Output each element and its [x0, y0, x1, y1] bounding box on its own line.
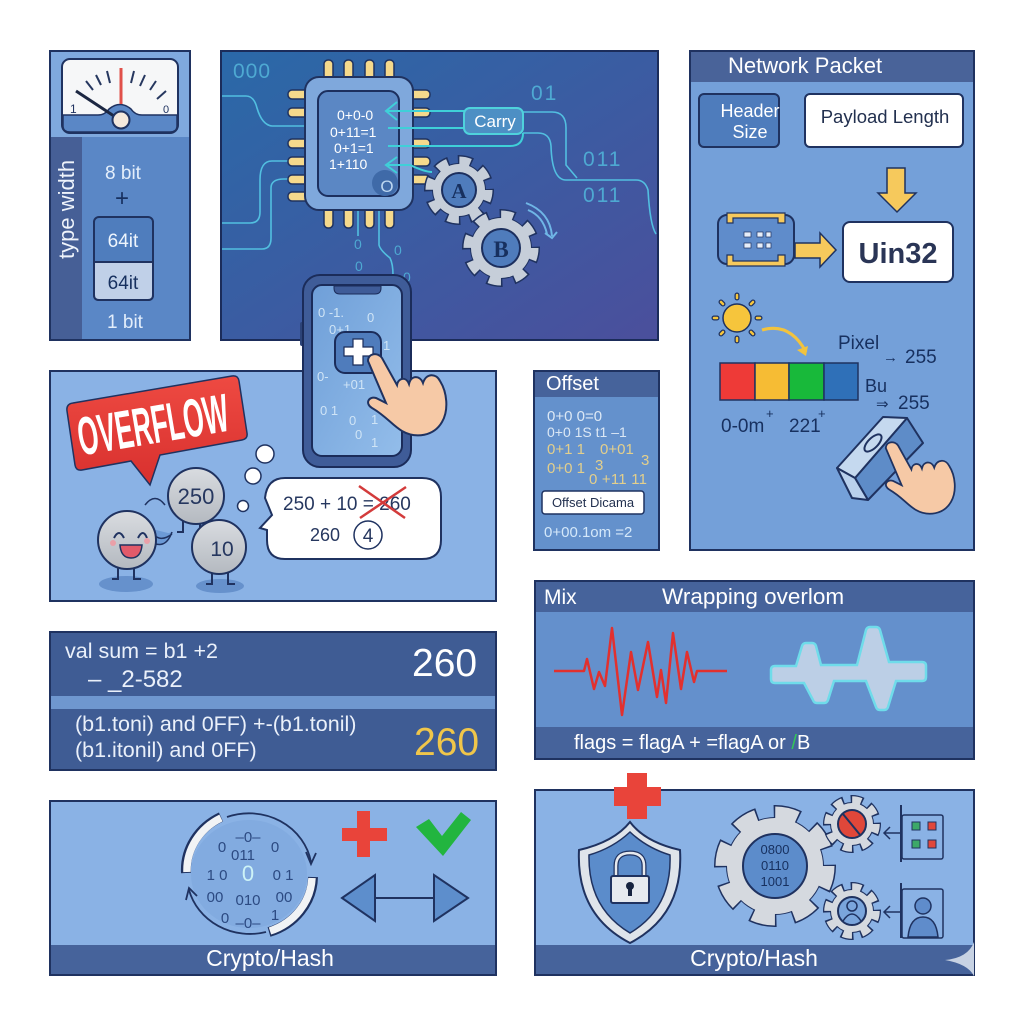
- panel: code sum: [50, 632, 496, 770]
- payload length box: Payload Length: [821, 106, 949, 127]
- offset equations: 0+0 0=0: [547, 408, 602, 425]
- character: coin 250: 250: [178, 484, 214, 509]
- uint32 box: [843, 222, 953, 282]
- color bar: [720, 363, 858, 400]
- pixel labels: [838, 333, 937, 414]
- pixel labels: 255: [898, 393, 930, 414]
- offset equations: 0+0 1S t1 –1: [547, 424, 627, 440]
- icon: analog gauge: 0: [163, 104, 169, 116]
- binary digits: 000: [233, 60, 271, 83]
- icon: cpu chip: 0+0-0: [337, 107, 373, 123]
- icon: cycle of bits: 00: [276, 889, 292, 906]
- payload length box: [805, 94, 963, 147]
- code line: – _2-582: [88, 666, 183, 693]
- header size box: Size: [732, 122, 768, 142]
- header bar: [691, 52, 973, 82]
- binary digits: 0: [355, 258, 363, 274]
- arrow: right: [795, 233, 836, 267]
- icon: cycle of bits: 0: [218, 839, 226, 856]
- rotation arrow: [526, 203, 557, 238]
- icon: cpu chip: 0+1=1: [334, 140, 374, 156]
- header: Wrapping overlom: [662, 584, 844, 609]
- footer: [536, 945, 973, 974]
- stacked 64 bit blocks: 64it: [108, 231, 139, 252]
- icon: cpu chip: O: [380, 177, 394, 196]
- header: [536, 582, 973, 612]
- icon: cpu chip: 0+11=1: [330, 124, 377, 140]
- speech bubble: 260: [310, 525, 340, 545]
- icon: sun: [714, 295, 760, 341]
- pixel labels: Pixel: [838, 333, 879, 354]
- label: 1 bit: 1 bit: [107, 312, 144, 333]
- offset label box: [542, 491, 644, 514]
- binary digits: 0: [354, 236, 362, 252]
- icon: cycle of bits: 1: [271, 907, 279, 924]
- phone digits: 0 -1.: [318, 305, 344, 320]
- character: coin 10: 10: [210, 538, 234, 561]
- value 260 yellow: 260: [414, 721, 479, 764]
- icon: analog gauge: [62, 59, 178, 133]
- icon: pointing hand: [368, 354, 446, 435]
- icon: cycle of bits: 00: [207, 889, 223, 906]
- icon: main gear with bits: [723, 814, 827, 918]
- icon: cycle of bits: [186, 813, 316, 934]
- phone digits: +01: [343, 377, 365, 392]
- offset result: 0+00.1om =2: [544, 524, 632, 541]
- offset equations: 0+01: [600, 441, 634, 458]
- offset label box: Offset Dicama: [552, 495, 635, 510]
- offset equations: 3: [641, 452, 649, 469]
- phone digits: 0 1: [320, 403, 338, 418]
- binary digits: 011: [583, 148, 622, 171]
- icon: cycle of bits: –0–: [235, 915, 261, 932]
- icon: small gear with blocked symbol: [828, 800, 876, 848]
- type width side strip: [51, 137, 82, 339]
- icon: gear B: B: [493, 237, 509, 262]
- icon: analog gauge: 1: [70, 102, 77, 116]
- offset equations: 0 +11 11: [589, 471, 647, 488]
- range labels: [721, 406, 826, 437]
- phone digits: [317, 305, 390, 450]
- header size box: Header: [720, 101, 780, 121]
- circuit traces: [222, 96, 656, 275]
- icon: cycle of bits: 0: [242, 861, 254, 886]
- code line: (b1.toni) and 0FF) +-(b1.tonil): [75, 712, 356, 736]
- icon: cycle of bits: 1 0: [207, 867, 227, 884]
- offset equations: 0+0 1: [547, 460, 585, 477]
- binary digits: 01: [531, 82, 558, 105]
- phone digits: 1: [371, 435, 378, 450]
- icon: status grid card: [901, 805, 943, 862]
- binary digits: [233, 60, 622, 285]
- icon: user card: [901, 883, 943, 938]
- phone with touch: [300, 275, 446, 467]
- icon: gear A: [430, 161, 488, 219]
- panel: crypto hash left: [50, 801, 496, 975]
- icon: red plus: [614, 773, 661, 819]
- header: Mix: [544, 586, 577, 609]
- footer: Crypto/Hash: [690, 945, 818, 971]
- pixel labels: Bu: [865, 376, 887, 396]
- icon: cycle of bits: 011: [231, 847, 255, 864]
- character: smiling coin: [98, 511, 172, 592]
- stacked 64 bit blocks: [94, 217, 153, 300]
- range labels: 0-0m: [721, 416, 764, 437]
- chart: red waveform: [554, 628, 727, 715]
- icon: cpu chip: 1+110: [329, 156, 367, 172]
- overflow sign: [67, 376, 247, 485]
- panel: overflow: [50, 371, 496, 601]
- icon: gear A: A: [451, 179, 467, 203]
- panel: processor and carry: [221, 51, 658, 340]
- binary digits: 0: [403, 269, 411, 285]
- binary digits: 0: [394, 242, 402, 258]
- offset equations: [547, 408, 649, 488]
- icon: small gear with user: [828, 887, 876, 935]
- offset header: Offset: [546, 373, 599, 395]
- plus button: [335, 332, 381, 373]
- icon: cycle of bits: 010: [235, 892, 261, 909]
- icon: green check: [416, 812, 471, 856]
- phone digits: 0-: [317, 369, 329, 384]
- chart: wrapped waveform: [771, 627, 926, 710]
- offset header: [535, 372, 658, 397]
- icon: cycle of bits: 0 1: [273, 867, 293, 884]
- phone digits: 0: [349, 413, 356, 428]
- icon: red plus: [342, 811, 387, 857]
- panel: crypto hash right: [535, 773, 974, 976]
- icon: packet chip: [718, 213, 794, 266]
- plus sign: +: [115, 185, 129, 212]
- character: coin 250: [145, 468, 224, 532]
- character: coin 10: [192, 520, 246, 593]
- icon: main gear with bits: 0800: [761, 842, 789, 857]
- corner sparkle: [945, 942, 974, 976]
- range labels: +: [766, 406, 774, 421]
- icon: cycle of bits: 0: [271, 839, 279, 856]
- curved arrow: [762, 328, 806, 352]
- value 260 white: 260: [412, 642, 477, 685]
- pixel labels: ⇒: [876, 396, 889, 413]
- panel: wrapping waveform: [535, 581, 974, 759]
- type width side strip: type width: [54, 160, 79, 259]
- icon: cycle of bits: 0: [221, 910, 229, 927]
- speech bubble: [260, 478, 441, 559]
- label: carry: Carry: [474, 112, 516, 131]
- header bar: Network Packet: [728, 53, 882, 78]
- icon: shield with lock: [579, 822, 680, 943]
- phone digits: 0+1: [329, 322, 351, 337]
- icon: pointing hand: [886, 442, 955, 514]
- icon: gear B: [468, 204, 534, 281]
- range labels: 221: [789, 416, 821, 437]
- offset equations: 0+1 1: [547, 441, 585, 458]
- label: 8 bit: 8 bit: [105, 163, 142, 184]
- stacked 64 bit blocks: 64it: [108, 273, 139, 294]
- range labels: +: [818, 406, 826, 421]
- panel: offset: [534, 371, 659, 550]
- header size box: [699, 94, 780, 147]
- icon: main gear with bits: 1001: [761, 874, 789, 889]
- label: carry: [464, 108, 523, 134]
- phone digits: 1: [371, 412, 378, 427]
- overflow sign: OVERFLOW: [73, 383, 233, 467]
- arrow head: [797, 346, 808, 356]
- thought bubbles: [238, 445, 274, 512]
- phone digits: 0: [355, 427, 362, 442]
- icon: cpu chip: [288, 60, 523, 228]
- icon: double arrow: [342, 875, 468, 921]
- arrows into gears: [884, 827, 901, 918]
- binary digits: 011: [583, 184, 622, 207]
- icon: main gear with bits: 0110: [761, 858, 789, 873]
- footer: [51, 945, 495, 974]
- footer: Crypto/Hash: [206, 945, 334, 971]
- speech bubble: 4: [363, 526, 374, 547]
- panel: type width gauge: [50, 51, 190, 340]
- arrow: down: [878, 168, 916, 212]
- icon: device block: [837, 417, 923, 500]
- phone digits: 0: [367, 310, 374, 325]
- offset equations: 3: [595, 457, 603, 474]
- pixel labels: 255: [905, 347, 937, 368]
- footer code: [536, 727, 973, 758]
- footer code: flags = flagA + =flagA or /B: [574, 732, 810, 754]
- code line: (b1.itonil) and 0FF): [75, 738, 257, 762]
- pixel labels: →: [883, 349, 898, 366]
- phone digits: 1: [383, 338, 390, 353]
- panel: network packet: [690, 51, 974, 550]
- code line: val sum = b1 +2: [65, 639, 218, 663]
- icon: cycle of bits: –0–: [235, 829, 261, 846]
- speech bubble: 250 + 10 = 260: [283, 494, 411, 515]
- uint32 box: Uin32: [859, 238, 937, 270]
